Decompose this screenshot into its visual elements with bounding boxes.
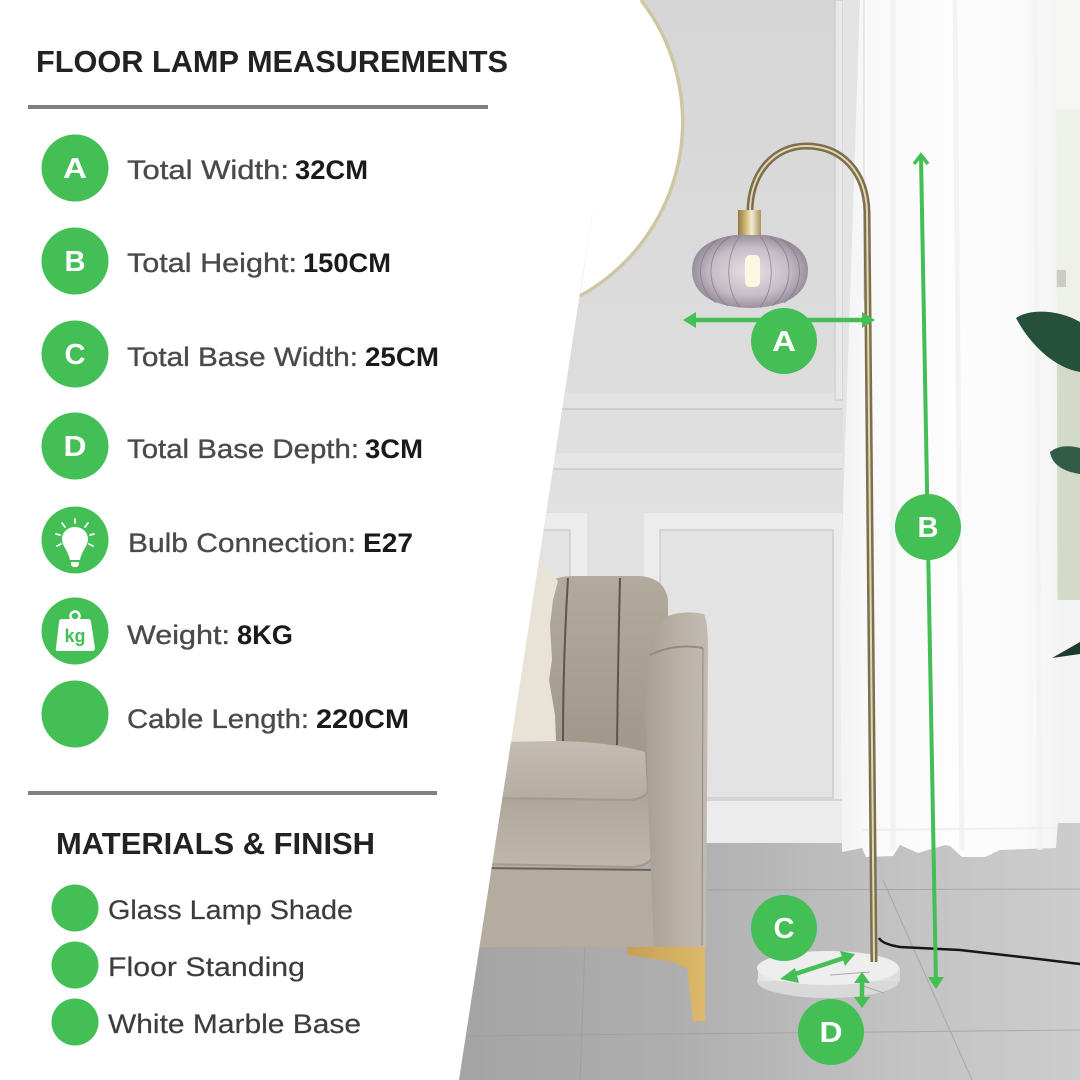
- spec row: bulb connection: [42, 506, 413, 574]
- plant leaves: [1016, 312, 1080, 658]
- spec row: total height: [42, 228, 391, 294]
- icon: kg weight: [56, 612, 95, 651]
- power cable: [879, 938, 1080, 964]
- divider: [28, 105, 488, 109]
- spec row: total width: [42, 134, 368, 202]
- spec row: total height: 150CM: [303, 248, 391, 278]
- material: white marble base: White Marble Base: [108, 1009, 361, 1039]
- spec row: total base width: [42, 320, 439, 388]
- wall: [450, 0, 860, 850]
- light bulb: [745, 255, 760, 287]
- panel: white diagonal sidebar: [0, 0, 625, 1080]
- material: floor standing: [52, 942, 305, 988]
- sofa leg: [627, 947, 705, 1021]
- wall moulding panels: [480, 0, 861, 850]
- dimension C: base width arrow and badge: [751, 895, 855, 983]
- dimension B: height arrow and badge: B: [918, 512, 938, 544]
- material: glass lamp shade: Glass Lamp Shade: [108, 895, 353, 925]
- dimension C: base width arrow and badge: C: [774, 913, 795, 945]
- spec row: total width: A: [63, 153, 87, 185]
- sofa: [470, 561, 708, 1021]
- dimension A: width arrow and badge: [683, 308, 875, 374]
- spec row: bulb connection: E27: [363, 528, 413, 558]
- spec row: total base width: Total Base Width:: [127, 342, 358, 372]
- spec row: weight: 8KG: [237, 620, 293, 650]
- spec row: cable length: Cable Length:: [127, 704, 309, 734]
- spec row: total width: Total Width:: [127, 155, 289, 185]
- sofa arm: [645, 612, 708, 947]
- marble base: [757, 951, 900, 998]
- spec row: cable length: [42, 680, 409, 748]
- material: floor standing: Floor Standing: [108, 952, 305, 982]
- spec row: total base depth: Total Base Depth:: [127, 434, 359, 464]
- glass shade: [692, 235, 808, 308]
- sofa base: [470, 868, 654, 947]
- spec row: total base depth: 3CM: [365, 434, 423, 464]
- heading: materials and finish: MATERIALS & FINISH: [56, 826, 375, 861]
- spec row: total base width: C: [64, 339, 86, 371]
- fur cushion: [500, 561, 558, 745]
- window: [1050, 0, 1080, 830]
- floor: [450, 823, 1080, 1080]
- dimension D: base depth arrow and badge: D: [820, 1017, 842, 1049]
- spec row: total base depth: [42, 412, 423, 480]
- seat cushion: [490, 741, 647, 799]
- sofa back: [520, 576, 668, 800]
- icon: light bulb: [56, 519, 94, 567]
- curtain: [840, 0, 1058, 857]
- dimension B: height arrow and badge: [895, 155, 961, 989]
- floor lamp: [692, 146, 1080, 998]
- spec row: total height: B: [64, 246, 86, 278]
- spec row: total width: 32CM: [295, 155, 368, 185]
- spec row: weight: Weight:: [127, 620, 230, 650]
- dimension A: width arrow and badge: A: [772, 326, 796, 358]
- divider: [28, 791, 437, 795]
- spec row: total base depth: D: [64, 431, 86, 463]
- panel: room photo: [450, 0, 1080, 1080]
- spec row: total base width: 25CM: [365, 342, 439, 372]
- spec row: weight: [42, 598, 293, 664]
- heading: floor lamp measurements: FLOOR LAMP MEASUREMENTS: [36, 44, 508, 79]
- lamp socket: [738, 210, 761, 236]
- material: white marble base: [52, 998, 361, 1046]
- spec row: cable length: 220CM: [316, 704, 409, 734]
- mirror: [580, 0, 683, 296]
- lamp pole and arc: [750, 146, 874, 962]
- icon: kg weight: kg: [64, 626, 86, 646]
- mirror frame: [580, 0, 683, 296]
- spec row: total height: Total Height:: [127, 248, 297, 278]
- dimension D: base depth arrow and badge: [798, 972, 870, 1065]
- material: glass lamp shade: [52, 884, 353, 932]
- spec row: bulb connection: Bulb Connection:: [128, 528, 356, 558]
